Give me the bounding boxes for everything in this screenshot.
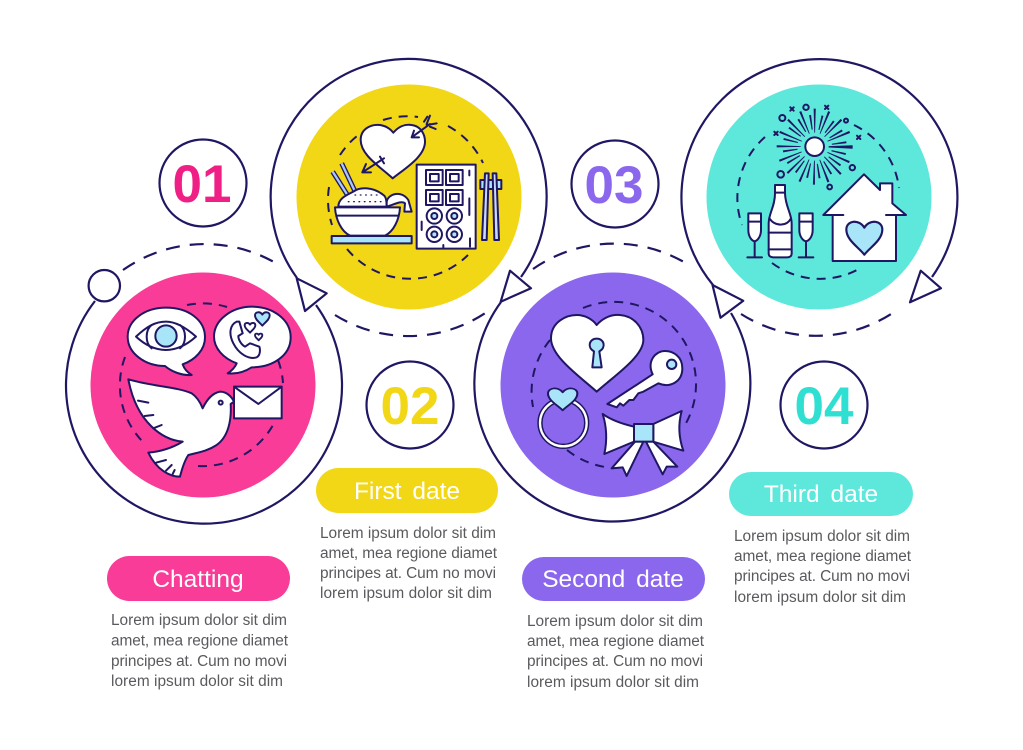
icon: champagne bottle xyxy=(769,185,792,257)
text block: second date: principes at. Cum no movi xyxy=(527,653,703,670)
label: chatting: Chatting xyxy=(152,566,244,593)
number badge 01 xyxy=(160,140,246,226)
filled circle: chatting xyxy=(90,272,316,498)
text block: second date: lorem ipsum dolor sit dim xyxy=(527,674,699,691)
label: second date: Second date xyxy=(542,566,684,593)
outer ring: step 2 xyxy=(271,59,547,278)
text block: first date: amet, mea regione diamet xyxy=(320,545,498,562)
number badge 04 xyxy=(780,362,868,448)
text block: first date: lorem ipsum dolor sit dim xyxy=(320,585,492,602)
inner dashed arcs: step 2 xyxy=(328,116,483,279)
icon: key xyxy=(607,351,682,407)
number badge 04: 04 xyxy=(795,377,854,436)
start marker circle xyxy=(89,270,120,301)
inner dashed arcs: step 3 xyxy=(532,302,696,467)
label: first date xyxy=(316,468,498,513)
label: second date xyxy=(522,557,705,601)
filled circle: second date xyxy=(500,272,726,498)
icon: bow xyxy=(603,411,683,476)
text block: second date: Lorem ipsum dolor sit dim xyxy=(527,613,703,630)
number badge 03: 03 xyxy=(585,156,643,215)
text block: third date: principes at. Cum no movi xyxy=(734,568,910,585)
outer ring: step 1 xyxy=(66,301,342,524)
text block: first date: Lorem ipsum dolor sit dim xyxy=(320,525,496,542)
number badge 01: 01 xyxy=(173,155,231,214)
inner dashed arcs: step 4 xyxy=(737,125,899,279)
number badge 03 xyxy=(572,140,658,228)
text block: third date: Lorem ipsum dolor sit dim xyxy=(734,528,910,545)
text block: third date: lorem ipsum dolor sit dim xyxy=(734,589,906,606)
dashed connector: step 2 bottom xyxy=(335,309,491,336)
text block: chatting xyxy=(111,612,289,690)
text block: chatting: lorem ipsum dolor sit dim xyxy=(111,673,283,690)
panel: step 3 second date xyxy=(474,244,750,521)
label: first date: First date xyxy=(354,478,460,505)
outer ring: step 3 xyxy=(474,302,750,521)
icon: eye speech bubble xyxy=(128,308,205,375)
label: chatting xyxy=(107,556,290,601)
icon: sushi board xyxy=(417,165,476,249)
icon: dove xyxy=(128,379,234,477)
text block: second date: amet, mea regione diamet xyxy=(527,633,705,650)
text block: second date xyxy=(527,613,705,691)
panel: step 1 chatting xyxy=(66,244,342,524)
text block: chatting: Lorem ipsum dolor sit dim xyxy=(111,612,287,629)
filled circle: third date xyxy=(706,84,932,310)
panel: step 2 first date xyxy=(271,59,547,336)
outer ring: step 4 xyxy=(681,59,957,285)
icon: envelope xyxy=(234,387,282,418)
number badge 02: 02 xyxy=(381,377,439,436)
text block: third date: amet, mea regione diamet xyxy=(734,548,912,565)
arrow: into step 4 xyxy=(712,285,743,318)
dashed connector: step 4 bottom xyxy=(741,310,897,336)
panel: step 4 third date xyxy=(681,59,957,336)
dashed connector: step 1 top xyxy=(123,244,279,270)
filled circle: first date xyxy=(296,84,522,310)
icon: firework xyxy=(774,105,860,189)
icon: heart pierced by arrow xyxy=(361,116,437,178)
icon: heart with keyhole xyxy=(551,315,643,392)
arrow: into step 2 xyxy=(297,278,327,311)
icon: champagne glasses xyxy=(747,213,813,257)
icon: rice bowl with shrimp and chopsticks xyxy=(332,163,412,243)
text block: chatting: principes at. Cum no movi xyxy=(111,653,287,670)
text block: first date: principes at. Cum no movi xyxy=(320,565,496,582)
icon: phone speech bubble with hearts xyxy=(214,307,291,374)
icon: ring with heart xyxy=(540,388,587,446)
arrow: into step 3 xyxy=(501,271,531,302)
text block: first date xyxy=(320,525,498,602)
icon: chopsticks on holder xyxy=(480,173,501,240)
text block: third date xyxy=(734,528,912,606)
number badge 02 xyxy=(366,362,454,448)
label: third date: Third date xyxy=(764,481,878,508)
icon: house with heart xyxy=(823,174,906,261)
dashed connector: step 3 top xyxy=(533,244,689,269)
arrow: end of step 4 xyxy=(910,271,941,302)
text block: chatting: amet, mea regione diamet xyxy=(111,632,289,650)
inner dashed arcs: step 1 xyxy=(120,303,283,466)
label: third date xyxy=(729,472,913,516)
